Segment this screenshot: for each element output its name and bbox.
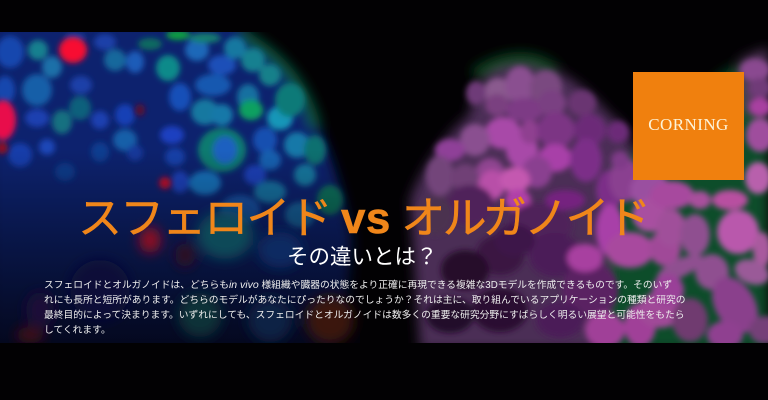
- logo: Corning orange square: [633, 72, 744, 180]
- title: スフェロイド vs オルガノイド: [78, 194, 648, 243]
- intro paragraph: 最終目的によって決まります。いずれにしても、スフェロイドとオルガノイドは数多くの重要な研究分野にすばらしく明るい展望と可能性をもたら: [44, 310, 684, 321]
- intro paragraph: [44, 279, 686, 336]
- subtitle: その違いとは？: [287, 245, 438, 269]
- intro paragraph: してくれます。: [44, 325, 111, 336]
- logo wordmark: CORNING: [648, 115, 729, 134]
- background microscopy photo: [0, 32, 768, 343]
- intro paragraph: スフェロイドとオルガノイドは、どちらもin vivo 様組織や臓器の状態をより正確に再現できる複雑な3Dモデルを作成できるものです。そのいず: [44, 279, 672, 291]
- intro paragraph: れにも長所と短所があります。どちらのモデルがあなたにぴったりなのでしょうか？それは主に、取り組んでいるアプリケーションの種類と研究の: [44, 295, 686, 306]
